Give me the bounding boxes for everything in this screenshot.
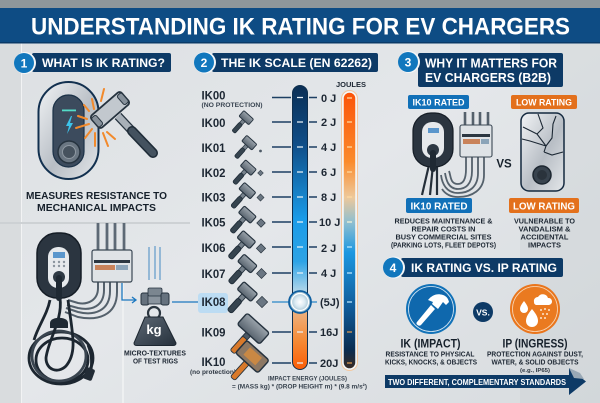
illustration: wall charger and cable <box>29 223 132 384</box>
heading: section 4: IK RATING VS. IP RATING <box>411 261 557 275</box>
joule values: 10 J <box>319 217 340 229</box>
rating labels <box>190 88 262 376</box>
text: IP ingress: (e.g., IP65) <box>520 368 550 374</box>
chart: joules gauge <box>336 80 366 370</box>
text: IK10 benefits: REPAIR COSTS IN <box>412 224 476 234</box>
rating labels: IK10 <box>202 355 226 369</box>
text: test rigs caption: MICRO-TEXTURES <box>124 348 186 358</box>
text: test rigs caption <box>124 348 186 366</box>
formula <box>232 376 367 390</box>
joule values: 2 J <box>321 243 336 255</box>
formula: = (MASS kg) * (DROP HEIGHT m) * (9.8 m/s²) <box>232 384 367 390</box>
highlight: IK08 <box>198 293 228 313</box>
icon: IK hammer <box>406 284 456 334</box>
icon: IP water and dust <box>510 284 560 334</box>
heading: section 2: 2 <box>201 56 208 70</box>
text: low rating risks: VULNERABLE TO <box>514 216 575 226</box>
rating labels: (NO PROTECTION) <box>202 102 262 109</box>
heading: section 1: WHAT IS IK RATING? <box>42 56 165 70</box>
text: VS comparison: VS <box>496 158 512 170</box>
joule values: 0 J <box>321 93 336 105</box>
rating labels: IK06 <box>202 241 226 255</box>
heading: section 4 <box>383 256 563 278</box>
rating labels: IK03 <box>202 190 226 204</box>
rating labels: IK09 <box>202 326 226 340</box>
heading: section 2: THE IK SCALE (EN 62262) <box>221 56 372 70</box>
icon: test weight <box>134 246 176 346</box>
text: IP ingress: IP (INGRESS) <box>502 336 568 350</box>
illustration: IK10 charger <box>413 112 492 197</box>
badge: low rating top: LOW RATING <box>516 98 572 108</box>
text: definition: MEASURES RESISTANCE TO <box>26 190 167 202</box>
joule values: 2 J <box>321 117 336 129</box>
joule values: 8 J <box>321 192 336 204</box>
marker: IK08 position <box>289 291 311 313</box>
text: IK10 benefits: REDUCES MAINTENANCE & <box>394 216 493 226</box>
heading: section 4: 4 <box>390 261 397 275</box>
joule values: 4 J <box>321 268 336 280</box>
icon: VS badge <box>473 302 493 322</box>
text: low rating risks: ACCIDENTAL <box>520 232 569 242</box>
badge: IK10 rated bottom: IK10 RATED <box>410 200 468 212</box>
rating labels: (no protection) <box>190 369 236 376</box>
rating labels: IK00 <box>202 88 226 102</box>
panel: IK vs IP <box>383 256 586 395</box>
formula: IMPACT ENERGY (JOULES) <box>268 376 347 382</box>
rating labels: IK02 <box>202 166 226 180</box>
rating labels: IK07 <box>202 267 226 281</box>
text: IP ingress: PROTECTION AGAINST DUST, <box>487 350 583 358</box>
arrow: to test rig <box>122 283 136 303</box>
arrow banner: complementary standards: TWO DIFFERENT, COMPLEMENTARY STANDARDS <box>388 377 566 387</box>
heading: section 3: 3 <box>405 56 412 70</box>
badge: IK10 rated top: IK10 RATED <box>412 98 465 108</box>
text: IK impact: RESISTANCE TO PHYSICAL <box>386 350 475 358</box>
text: low rating risks: IMPACTS <box>528 240 561 250</box>
joule values: 4 J <box>321 142 336 154</box>
illustration: cracked charger <box>521 113 564 191</box>
rating labels: IK05 <box>202 216 226 230</box>
text: test rigs caption: OF TEST RIGS <box>133 356 178 366</box>
heading: section 2 <box>194 52 378 74</box>
text: IP ingress: WATER, & SOLID OBJECTS <box>492 358 578 366</box>
text: IK10 benefits <box>391 216 496 250</box>
joule values: 16J <box>320 327 338 339</box>
arrow: rig to IK08 <box>172 301 198 303</box>
joule values: 20J <box>320 358 338 370</box>
heading: section 1 <box>14 52 171 74</box>
joule values: 6 J <box>321 167 336 179</box>
text: IP ingress <box>487 336 583 374</box>
rating labels: IK08 <box>202 295 226 309</box>
text: definition: MECHANICAL IMPACTS <box>37 202 156 214</box>
heading: section 3: EV CHARGERS (B2B) <box>425 71 551 85</box>
text: IK10 benefits: BUSY COMMERCIAL SITES <box>396 232 492 242</box>
text: IK impact: IK (IMPACT) <box>400 336 460 350</box>
title banner: UNDERSTANDING IK RATING FOR EV CHARGERS <box>31 14 570 40</box>
joule values <box>319 93 340 370</box>
chart: impact scale thermometer <box>272 86 317 370</box>
top strip <box>0 0 600 8</box>
hammer icons <box>221 111 270 389</box>
panel: why it matters <box>391 51 579 250</box>
rating labels: IK00 <box>202 116 226 130</box>
heading: section 3: WHY IT MATTERS FOR <box>425 56 557 70</box>
text: low rating risks <box>514 216 575 250</box>
badge: low rating bottom: LOW RATING <box>513 200 575 212</box>
joule values: (5J) <box>320 297 340 309</box>
heading: section 1: 1 <box>21 56 28 70</box>
rating labels: IK01 <box>202 141 226 155</box>
icon: charger struck by hammer <box>38 82 153 179</box>
panel: the IK scale <box>190 52 378 390</box>
icon: VS badge: VS. <box>476 308 490 318</box>
text: IK10 benefits: (PARKING LOTS, FLEET DEPOTS) <box>391 240 496 250</box>
text: low rating risks: VANDALISM & <box>518 224 571 234</box>
chart: joules gauge: JOULES <box>336 80 366 89</box>
text: IK impact <box>385 336 477 366</box>
text: IK impact: KICKS, KNOCKS, & OBJECTS <box>385 358 477 366</box>
icon: test weight: kg <box>146 322 162 337</box>
arrow banner: complementary standards <box>385 368 586 395</box>
text: definition <box>26 190 167 214</box>
heading: section 3 <box>398 51 563 87</box>
panel: what is IK rating <box>14 52 198 384</box>
